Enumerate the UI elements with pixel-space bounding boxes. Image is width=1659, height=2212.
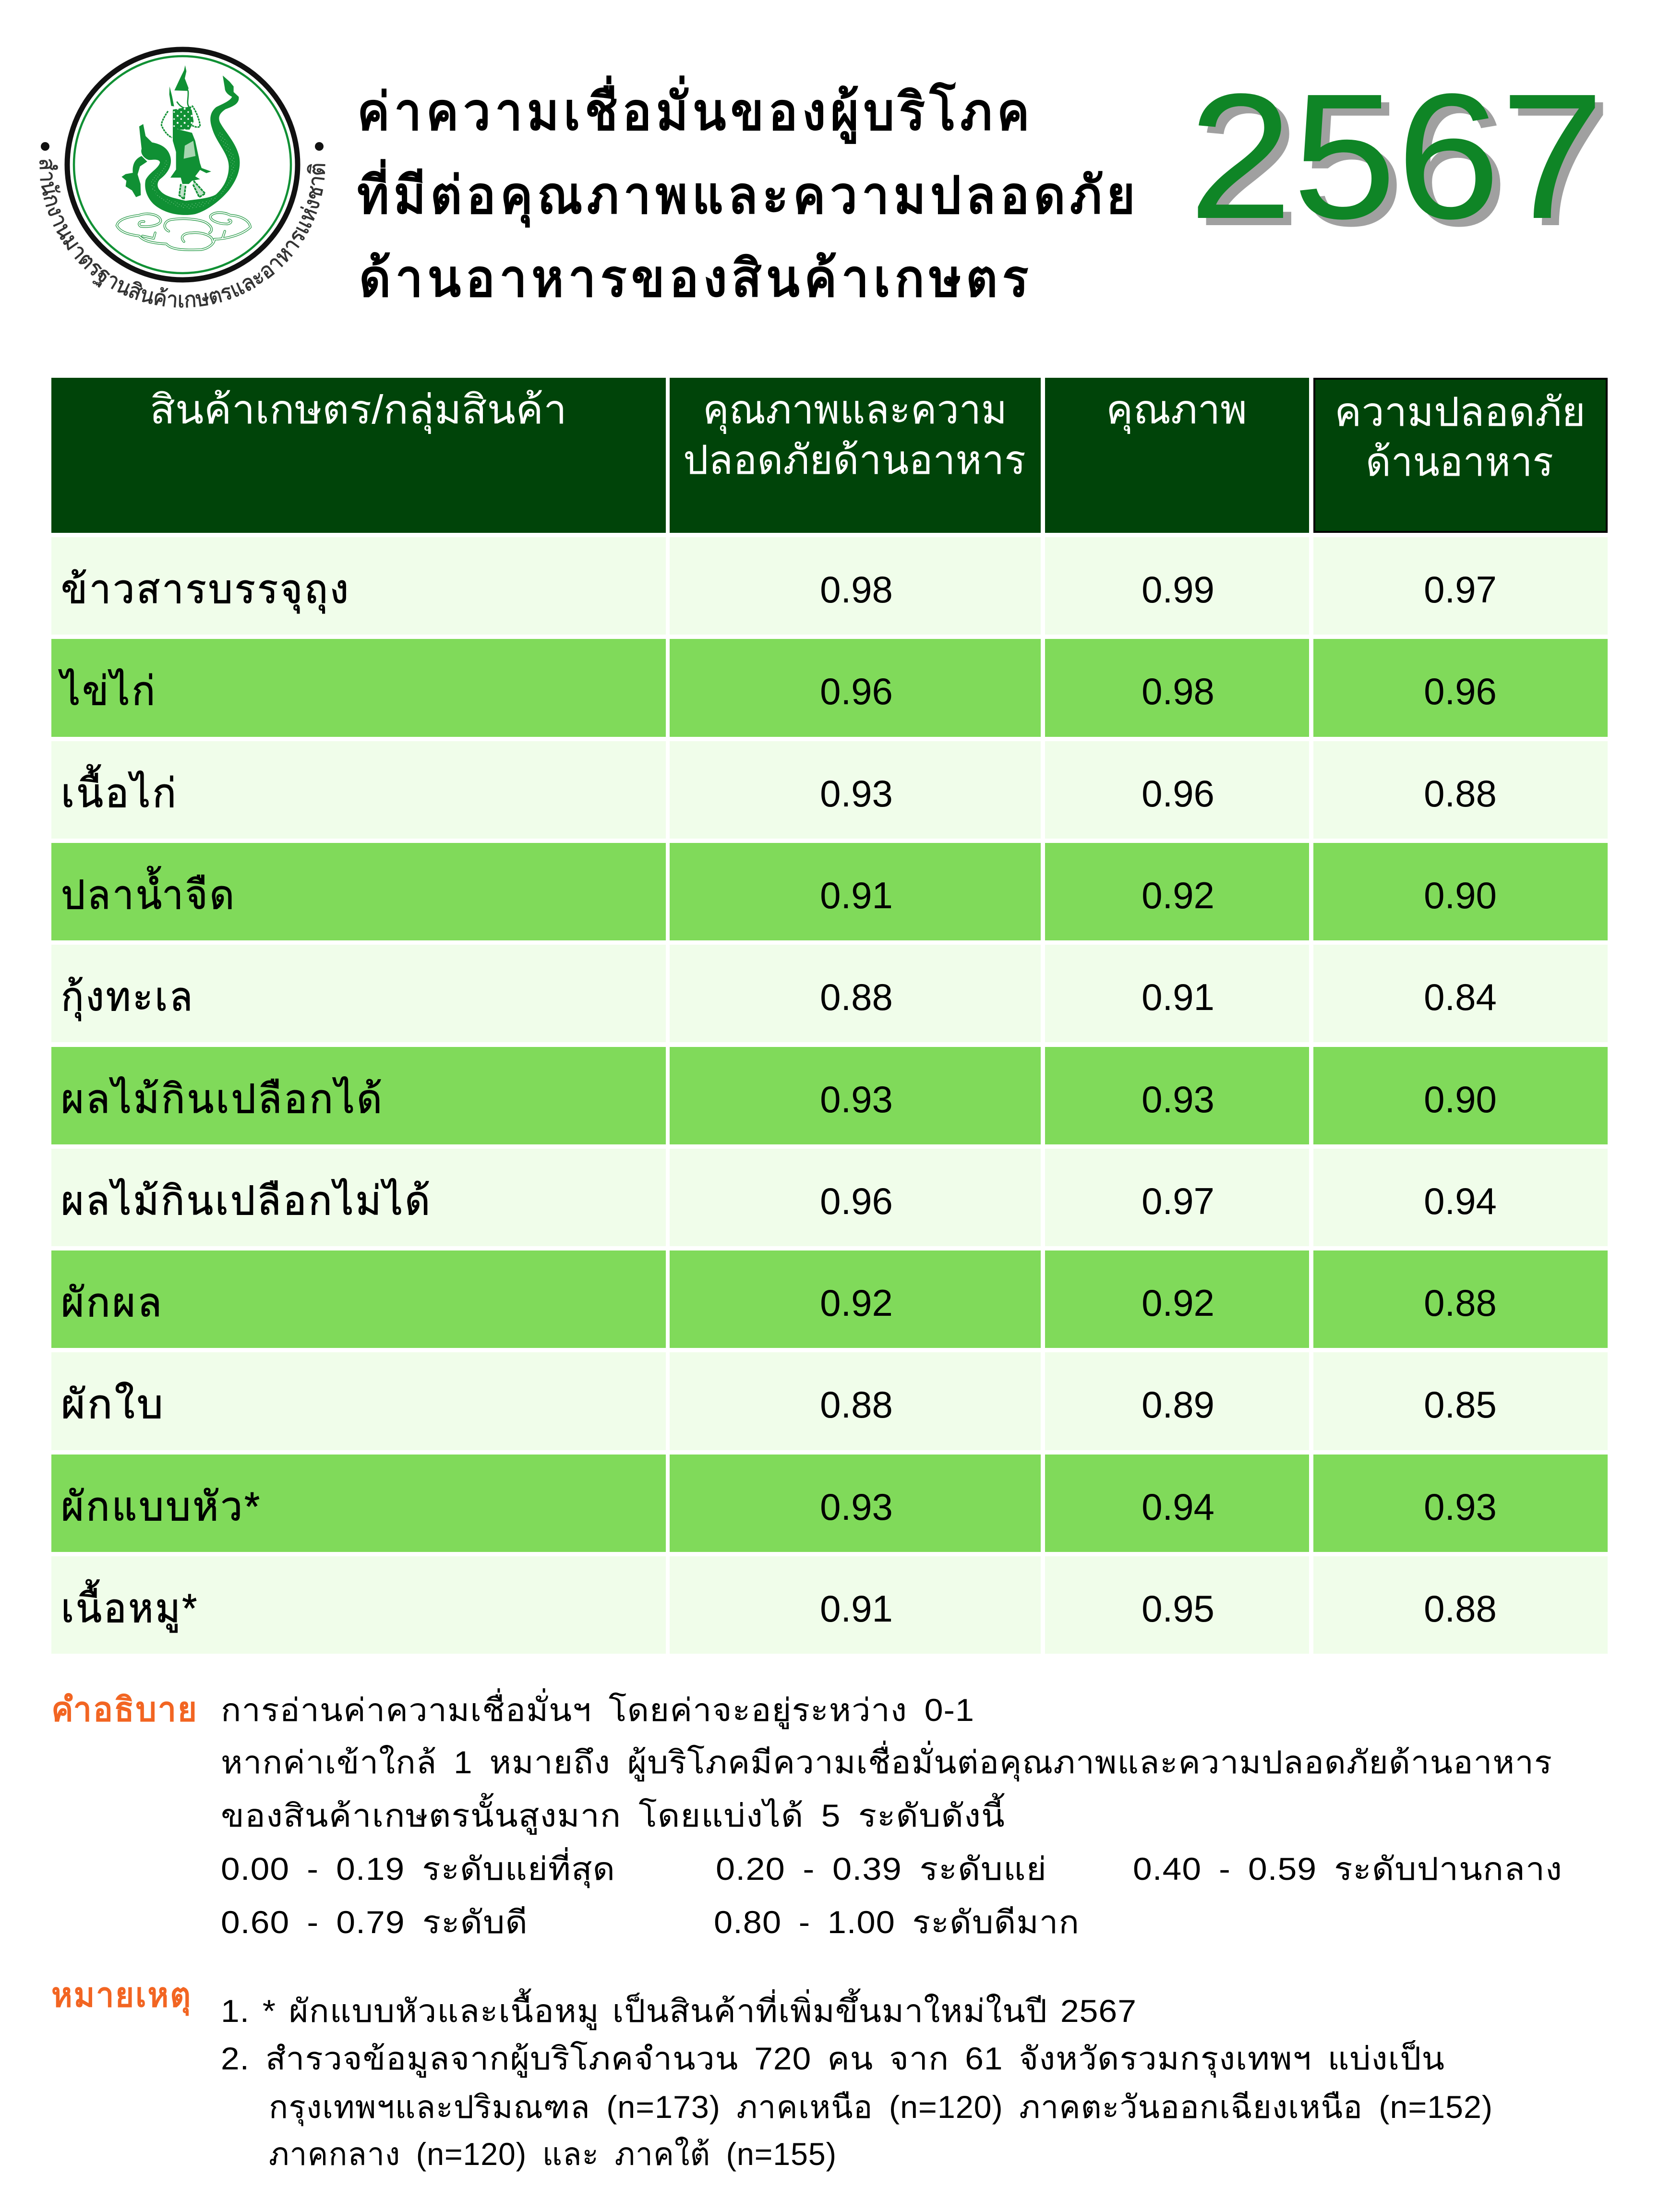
explanation text: การอ่านค่าความเชื่อมั่นฯ โดยค่าจะอยู่ระหว่าง 0-1 — [221, 1688, 974, 1730]
logo naga, deity figure and clouds — [117, 65, 251, 250]
row: กุ้งทะเล — [51, 945, 1608, 1042]
row: ผักแบบหัว*: 0.93 — [1424, 1486, 1497, 1528]
row: กุ้งทะเล: 0.84 — [1424, 976, 1497, 1018]
notes text — [221, 1988, 1493, 2172]
logo: national bureau seal — [39, 47, 325, 308]
explanation heading: คำอธิบาย — [51, 1691, 198, 1728]
deity crown and face — [174, 65, 189, 91]
row: ผักผล — [51, 1250, 1608, 1348]
table header row: คุณภาพ — [1106, 387, 1247, 434]
row: ผักใบ — [51, 1352, 1608, 1450]
notes heading: หมายเหตุ — [51, 1976, 192, 2016]
row: กุ้งทะเล: 0.88 — [820, 976, 893, 1018]
title — [357, 75, 1140, 307]
row: ไข่ไก่: 0.98 — [1142, 670, 1214, 712]
row: ผลไม้กินเปลือกไม่ได้ — [51, 1149, 1608, 1246]
row: เนื้อหมู*: 0.91 — [820, 1587, 893, 1630]
score level scale: 0.40 - 0.59 ระดับปานกลาง — [1133, 1851, 1563, 1887]
row: ผลไม้กินเปลือกได้: ผลไม้กินเปลือกได้ — [61, 1076, 384, 1121]
row: ผลไม้กินเปลือกได้: 0.93 — [1142, 1078, 1214, 1120]
table header row — [51, 378, 1607, 533]
deity waist and skirt — [170, 128, 211, 184]
row: ผลไม้กินเปลือกได้: 0.93 — [820, 1078, 893, 1120]
row: เนื้อไก่: 0.88 — [1424, 772, 1497, 815]
explanation text: ของสินค้าเกษตรนั้นสูงมาก โดยแบ่งได้ 5 ระดับดังนี้ — [221, 1793, 1005, 1835]
logo dots — [41, 142, 324, 151]
row: เนื้อไก่: 0.93 — [820, 772, 893, 815]
table header row: คุณภาพและความ — [703, 387, 1007, 434]
row: ปลาน้ำจืด — [51, 843, 1608, 940]
deity torso — [173, 107, 193, 130]
notes text: 1. * ผักแบบหัวและเนื้อหมู เป็นสินค้าที่เพิ่มขึ้นมาใหม่ในปี 2567 — [221, 1988, 1137, 2031]
notes text: ภาคกลาง (n=120) และ ภาคใต้ (n=155) — [269, 2136, 837, 2172]
row: ข้าวสารบรรจุถุง: ข้าวสารบรรจุถุง — [61, 566, 350, 614]
row: เนื้อหมู*: 0.88 — [1424, 1587, 1497, 1630]
row: ไข่ไก่: ไข่ไก่ — [58, 668, 157, 713]
row: เนื้อไก่: เนื้อไก่ — [61, 764, 178, 816]
notes text: 2. สำรวจข้อมูลจากผู้บริโภคจำนวน 720 คน จาก 61 จังหวัดรวมกรุงเทพฯ แบ่งเป็น — [221, 2040, 1445, 2078]
row: เนื้อหมู*: 0.95 — [1142, 1587, 1214, 1630]
row: ผลไม้กินเปลือกไม่ได้: 0.96 — [820, 1180, 893, 1222]
row: ผักแบบหัว*: ผักแบบหัว* — [61, 1484, 262, 1529]
row: ผักแบบหัว*: 0.93 — [820, 1486, 893, 1528]
deity legs — [179, 181, 205, 199]
row: ผักแบบหัว*: 0.94 — [1142, 1486, 1214, 1528]
score level scale: 0.80 - 1.00 ระดับดีมาก — [714, 1904, 1080, 1940]
row: ผลไม้กินเปลือกได้: 0.90 — [1424, 1078, 1497, 1120]
naga jaw — [121, 156, 147, 197]
row: ผักผล: ผักผล — [61, 1280, 164, 1325]
row: ปลาน้ำจืด: 0.91 — [820, 874, 893, 916]
row: ผลไม้กินเปลือกได้ — [51, 1047, 1608, 1144]
row: ปลาน้ำจืด: 0.90 — [1424, 874, 1497, 916]
title: ด้านอาหารของสินค้าเกษตร — [359, 249, 1033, 307]
notes text: กรุงเทพฯและปริมณฑล (n=173) ภาคเหนือ (n=120) ภาคตะวันออกเฉียงเหนือ (n=152) — [269, 2089, 1493, 2127]
row: ข้าวสารบรรจุถุง: 0.98 — [820, 568, 893, 611]
logo ring — [67, 49, 298, 280]
row: เนื้อไก่ — [51, 741, 1608, 839]
score level scale: 0.60 - 0.79 ระดับดี — [221, 1904, 528, 1940]
row: ผักใบ: ผักใบ — [61, 1382, 165, 1427]
row: ข้าวสารบรรจุถุง — [51, 537, 1608, 635]
table — [51, 378, 1608, 1654]
explanation block — [51, 1688, 1563, 1940]
explanation text — [221, 1688, 1552, 1835]
row: ผลไม้กินเปลือกไม่ได้: ผลไม้กินเปลือกไม่ได้ — [61, 1178, 432, 1223]
title: ค่าความเชื่อมั่นของผู้บริโภค — [357, 75, 1034, 144]
row: ไข่ไก่ — [51, 639, 1608, 737]
row: ผลไม้กินเปลือกไม่ได้: 0.97 — [1142, 1180, 1214, 1222]
year 2567 with drop shadow: 2567 — [1189, 56, 1604, 256]
row: กุ้งทะเล: กุ้งทะเล — [61, 974, 194, 1022]
explanation text: หากค่าเข้าใกล้ 1 หมายถึง ผู้บริโภคมีความเชื่อมั่นต่อคุณภาพและความปลอดภัยด้านอาหาร — [221, 1741, 1552, 1782]
logo curved organisation name: สำนักงานมาตรฐานสินค้าเกษตรและอาหารแห่งชาติ — [39, 159, 325, 308]
row: เนื้อหมู* — [51, 1556, 1608, 1654]
score level scale: 0.20 - 0.39 ระดับแย่ — [716, 1851, 1047, 1887]
row: ปลาน้ำจืด: ปลาน้ำจืด — [61, 866, 236, 917]
title: ที่มีต่อคุณภาพและความปลอดภัย — [357, 159, 1140, 228]
table header row: ความปลอดภัย — [1334, 389, 1586, 434]
row: ผลไม้กินเปลือกไม่ได้: 0.94 — [1424, 1180, 1497, 1222]
clouds — [117, 213, 251, 250]
row: ข้าวสารบรรจุถุง: 0.99 — [1142, 568, 1214, 611]
naga scale texture — [151, 132, 235, 209]
naga body — [139, 75, 240, 215]
row: ผักผล: 0.88 — [1424, 1282, 1497, 1324]
year 2567 with drop shadow: 2567 — [1197, 63, 1612, 263]
table header row: ปลอดภัยด้านอาหาร — [683, 437, 1026, 482]
notes block — [51, 1976, 1493, 2172]
table header row: ด้านอาหาร — [1366, 439, 1553, 484]
row: ผักใบ: 0.88 — [820, 1383, 893, 1426]
row: ข้าวสารบรรจุถุง: 0.97 — [1424, 568, 1497, 611]
row: ไข่ไก่: 0.96 — [1424, 670, 1497, 712]
table header row: สินค้าเกษตร/กลุ่มสินค้า — [150, 387, 567, 434]
row: ผักใบ: 0.85 — [1424, 1383, 1497, 1426]
row: ผักผล: 0.92 — [1142, 1282, 1214, 1324]
row: ผักแบบหัว* — [51, 1455, 1608, 1552]
row: ผักใบ: 0.89 — [1142, 1383, 1214, 1426]
row: ปลาน้ำจืด: 0.92 — [1142, 874, 1214, 916]
row: เนื้อหมู*: เนื้อหมู* — [61, 1579, 199, 1633]
row: ไข่ไก่: 0.96 — [820, 670, 893, 712]
score level scale: 0.00 - 0.19 ระดับแย่ที่สุด — [221, 1847, 615, 1888]
row: เนื้อไก่: 0.96 — [1142, 772, 1214, 815]
row: ผักผล: 0.92 — [820, 1282, 893, 1324]
score level scale — [221, 1847, 1563, 1940]
row: กุ้งทะเล: 0.91 — [1142, 976, 1214, 1018]
